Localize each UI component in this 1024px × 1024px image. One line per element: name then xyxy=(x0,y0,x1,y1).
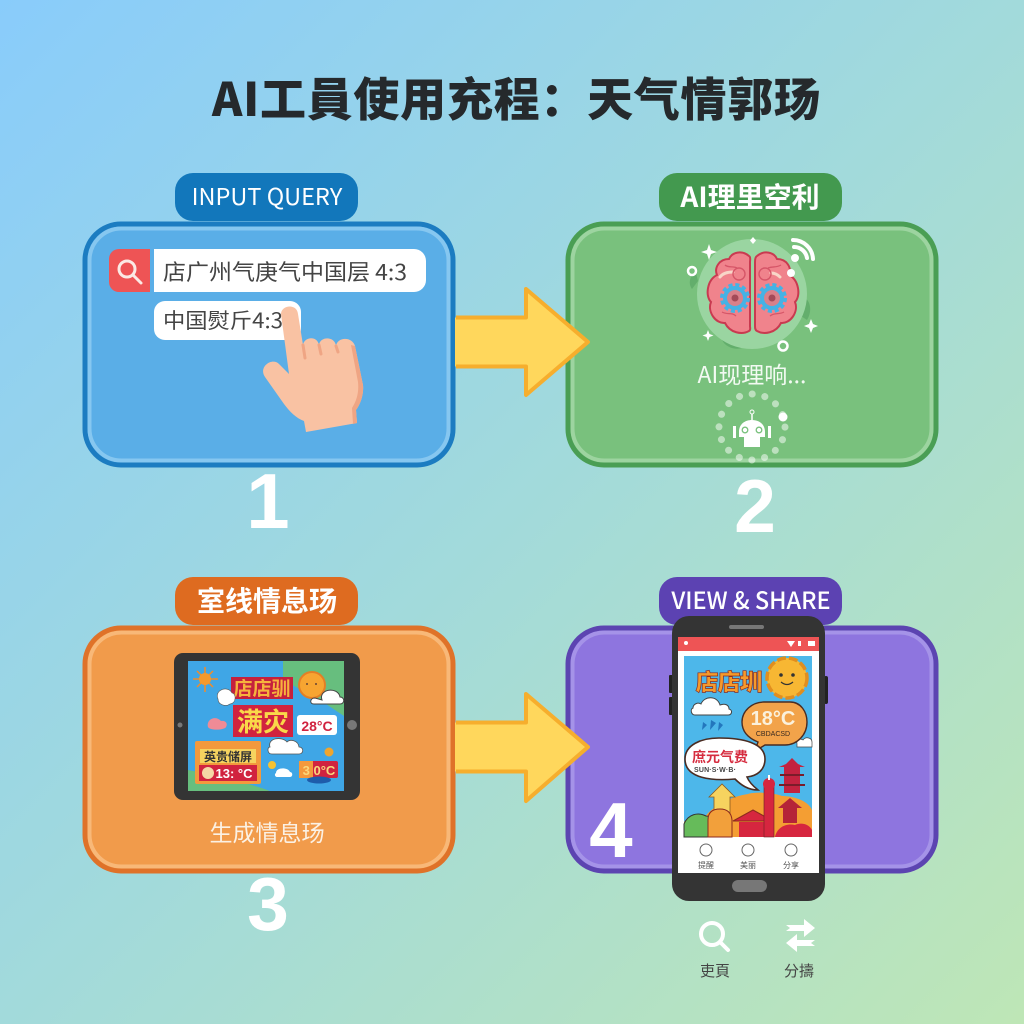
tab bar icons xyxy=(698,844,799,871)
poster sun left xyxy=(193,667,218,692)
arrow: step 3 to 4 xyxy=(455,694,588,801)
title: AI工員使用充程：天气情郭玚 xyxy=(211,64,820,130)
icon: share arrows xyxy=(786,919,815,952)
tablet with weather poster xyxy=(174,653,360,800)
poster lower-left card xyxy=(195,741,261,784)
tablet with weather poster: 13: °C xyxy=(216,766,253,781)
tablet with weather poster: 28°C xyxy=(301,718,333,734)
arrow: step 1 to 2 xyxy=(455,289,588,395)
step 2 card xyxy=(568,224,936,465)
step 3 card xyxy=(85,628,453,871)
poster clouds xyxy=(217,689,235,705)
step 4 card xyxy=(568,628,936,871)
poster background xyxy=(684,656,812,837)
panel: step 1 input query xyxy=(85,173,453,465)
tablet with weather poster: 满灾 xyxy=(237,702,289,739)
poster temperature chip xyxy=(297,715,337,735)
step 1 heading pill: INPUT QUERY xyxy=(192,178,343,212)
icon: magnifier xyxy=(701,923,728,950)
sparkles xyxy=(688,237,818,350)
poster temperature bubble xyxy=(742,702,807,751)
step 2 heading pill xyxy=(659,173,842,221)
tablet with weather poster: 英贵储屏 xyxy=(204,748,252,765)
poster speech bubble: 庶元气费 xyxy=(692,747,748,767)
panel: step 4 view and share xyxy=(568,577,936,901)
label: view: 吏頁 xyxy=(700,960,730,981)
panel: step 3 generate infographic xyxy=(85,577,453,871)
number 4: 4 xyxy=(589,786,633,874)
search input box: 店广州气庚气中国层 4:3 xyxy=(163,255,407,287)
step 2 heading pill: AI理里空利 xyxy=(679,176,820,216)
search input box xyxy=(154,249,426,292)
label: share: 分擣 xyxy=(784,960,814,981)
poster temperature bubble: CBDACSD xyxy=(756,731,790,738)
icon: red search button xyxy=(109,249,150,292)
tab bar icons: 美丽 xyxy=(740,860,756,871)
icon: brain with gears xyxy=(690,239,810,349)
poster lower-right card xyxy=(299,761,338,778)
poster sun right xyxy=(299,672,325,698)
tab bar icons: 提醒 xyxy=(698,860,714,871)
poster speech bubble: SUN·S·W·B· xyxy=(694,767,736,774)
poster headline xyxy=(233,705,293,737)
tablet with weather poster: 3 0°C xyxy=(303,763,336,778)
suggestion box xyxy=(154,301,301,340)
poster title xyxy=(231,677,293,699)
number 1: 1 xyxy=(246,457,290,545)
generating label: 生成情息玚 xyxy=(210,814,324,848)
panel: step 2 AI processing xyxy=(568,173,936,465)
poster skyline xyxy=(684,758,812,837)
poster cloud and rain xyxy=(691,698,732,715)
poster title: 店店圳 xyxy=(696,663,762,697)
icon: pointing hand xyxy=(263,306,363,432)
poster speech bubble xyxy=(685,738,765,790)
tab bar icons: 分享 xyxy=(783,860,799,871)
poster temperature bubble: 18°C xyxy=(751,708,795,730)
processing label: AI现理响... xyxy=(698,356,806,390)
poster sun xyxy=(767,658,807,698)
small cloud xyxy=(797,738,812,747)
step 4 heading pill: VIEW & SHARE xyxy=(670,582,831,616)
smartphone with poster xyxy=(669,616,828,901)
suggestion box: 中国熨斤4:3 xyxy=(163,305,283,335)
home button xyxy=(732,880,767,892)
step 4 heading pill xyxy=(659,577,842,625)
step 1 card xyxy=(85,224,453,465)
step 1 heading pill xyxy=(175,173,358,221)
step 3 heading pill: 室线情息玚 xyxy=(197,580,337,620)
number 2: 2 xyxy=(734,464,776,548)
step 3 heading pill xyxy=(175,577,358,625)
number 3: 3 xyxy=(247,862,289,946)
tablet with weather poster: 店店驯 xyxy=(233,674,291,701)
icon: wifi signal xyxy=(792,240,813,261)
icon: robot with loading ring xyxy=(719,394,788,460)
